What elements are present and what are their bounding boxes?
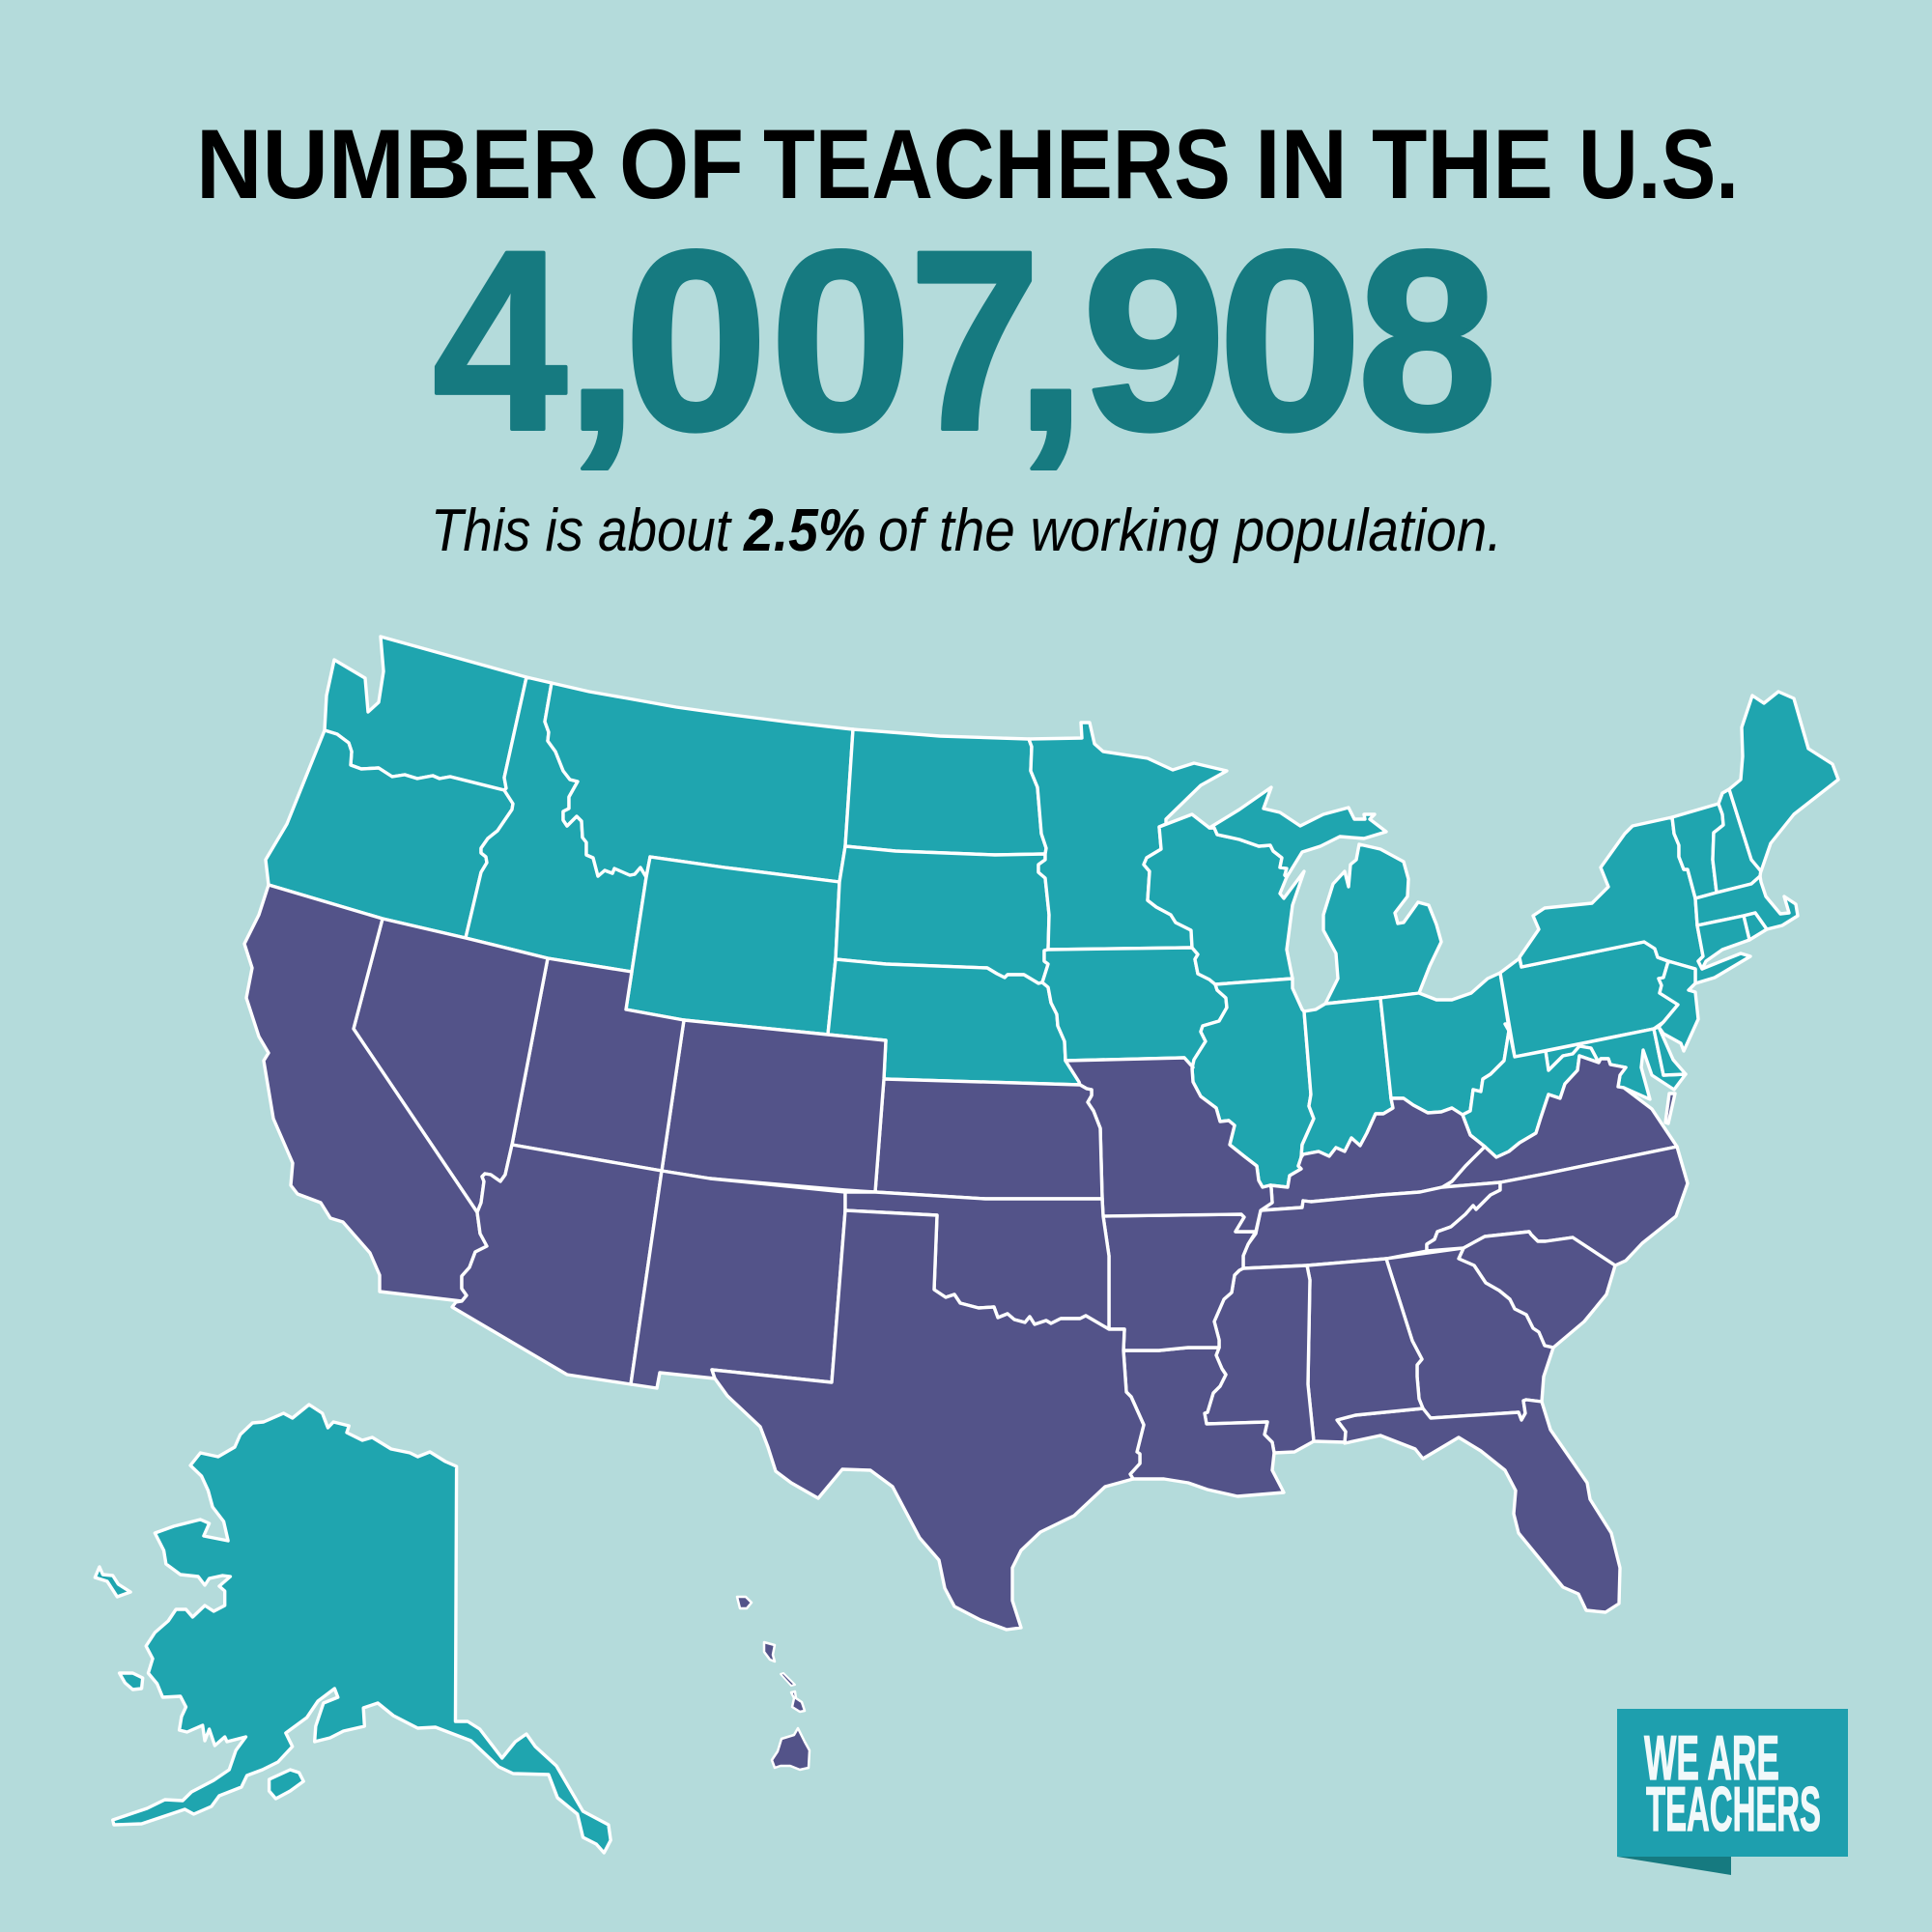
state: North Dakota [845, 729, 1046, 855]
Hawaii: Big Island [772, 1728, 810, 1770]
big number: 4,007,908: , [1014, 198, 1087, 484]
big number: 4,007,908: 0 [1218, 198, 1362, 484]
state: Virginia eastern shore [1665, 1094, 1675, 1123]
state: Maine [1729, 692, 1838, 871]
state: Tennessee [1243, 1182, 1500, 1268]
Alaska: Nunivak Island [120, 1673, 143, 1690]
Alaska: Kodiak Island [270, 1770, 303, 1799]
state: Idaho [466, 677, 646, 972]
title: THE [1372, 109, 1553, 219]
state: New Mexico [631, 1171, 845, 1388]
state: New York [1520, 817, 1750, 983]
state: Wyoming [626, 857, 839, 1035]
state: Louisiana [1123, 1348, 1284, 1496]
state: Nevada [354, 919, 548, 1212]
state: Texas [712, 1210, 1144, 1630]
subtitle: 2.5% [743, 497, 866, 564]
state: Iowa [1042, 948, 1227, 1067]
subtitle [431, 497, 1502, 564]
big number: 4,007,908: 0 [770, 198, 912, 484]
state: Kentucky [1261, 1098, 1485, 1210]
state: Oklahoma [845, 1192, 1109, 1329]
map: contiguous United States [244, 637, 1838, 1630]
state: Ohio [1380, 973, 1509, 1115]
logo panel [1617, 1709, 1848, 1857]
Alaska: St. Lawrence Island [95, 1567, 130, 1597]
state: Nebraska [828, 959, 1080, 1085]
Hawaii: Maui [791, 1691, 805, 1712]
state: Pennsylvania [1500, 942, 1678, 1057]
state: Colorado [662, 1020, 886, 1192]
state: Wisconsin [1144, 814, 1304, 984]
state: Mississippi [1205, 1265, 1314, 1453]
Hawaii: Kauai [737, 1597, 752, 1608]
logo text [1644, 1722, 1821, 1844]
state: West Virginia [1463, 1024, 1599, 1157]
state: Missouri [1065, 1058, 1272, 1232]
state: New Jersey [1659, 961, 1698, 1051]
state: Florida [1337, 1400, 1620, 1612]
subtitle: of the working population. [878, 497, 1502, 564]
state: Arizona [452, 1145, 662, 1384]
state: Maryland [1546, 1029, 1686, 1099]
state: South Carolina [1459, 1232, 1615, 1348]
big number: 4,007,908 [433, 198, 1497, 484]
title: NUMBER [196, 109, 598, 219]
state: Montana [545, 683, 853, 882]
state: California [244, 885, 487, 1301]
state: Kansas [875, 1079, 1102, 1199]
state: Delaware [1654, 1027, 1686, 1075]
state: North Carolina [1427, 1147, 1688, 1265]
state: Arkansas [1103, 1214, 1256, 1350]
state: South Dakota [836, 846, 1049, 983]
state: Michigan upper peninsula [1209, 787, 1386, 877]
state: Washington [325, 637, 526, 790]
logo text: WE ARE [1644, 1722, 1779, 1793]
title: TEACHERS [763, 109, 1231, 219]
state: New Hampshire [1713, 789, 1761, 893]
title: IN [1255, 109, 1348, 219]
state: Massachusetts [1695, 876, 1798, 929]
big number: 4,007,908: 0 [624, 198, 768, 484]
big number: 4,007,908: 7 [909, 198, 1040, 484]
big number: 4,007,908: 8 [1357, 198, 1497, 484]
map: Alaska [95, 1405, 611, 1853]
big number: 4,007,908: 4 [433, 198, 569, 484]
state: Indiana [1301, 998, 1393, 1157]
state: Vermont [1672, 804, 1723, 898]
state: Georgia [1386, 1248, 1553, 1420]
Hawaii: Oahu [764, 1642, 775, 1662]
state: Alabama [1307, 1259, 1423, 1442]
big number: 4,007,908: 9 [1082, 198, 1226, 484]
title [196, 109, 1739, 219]
state: Michigan lower peninsula [1323, 844, 1441, 1004]
state: Virginia [1442, 1056, 1677, 1187]
state: Minnesota [1029, 723, 1227, 950]
title: OF [619, 109, 744, 219]
big number: 4,007,908: , [564, 198, 639, 484]
Hawaii: Molokai [781, 1673, 795, 1686]
state: Rhode Island [1744, 913, 1767, 940]
state: Oregon [266, 730, 513, 938]
state: Illinois [1192, 979, 1314, 1187]
subtitle: This is about [431, 497, 732, 564]
title: U.S. [1578, 109, 1739, 219]
state: Utah [512, 958, 684, 1171]
state: Connecticut [1697, 916, 1749, 969]
Alaska mainland [113, 1405, 611, 1853]
logo ribbon fold [1617, 1857, 1731, 1875]
logo: We Are Teachers [1617, 1709, 1848, 1875]
map: Hawaii [737, 1597, 810, 1770]
